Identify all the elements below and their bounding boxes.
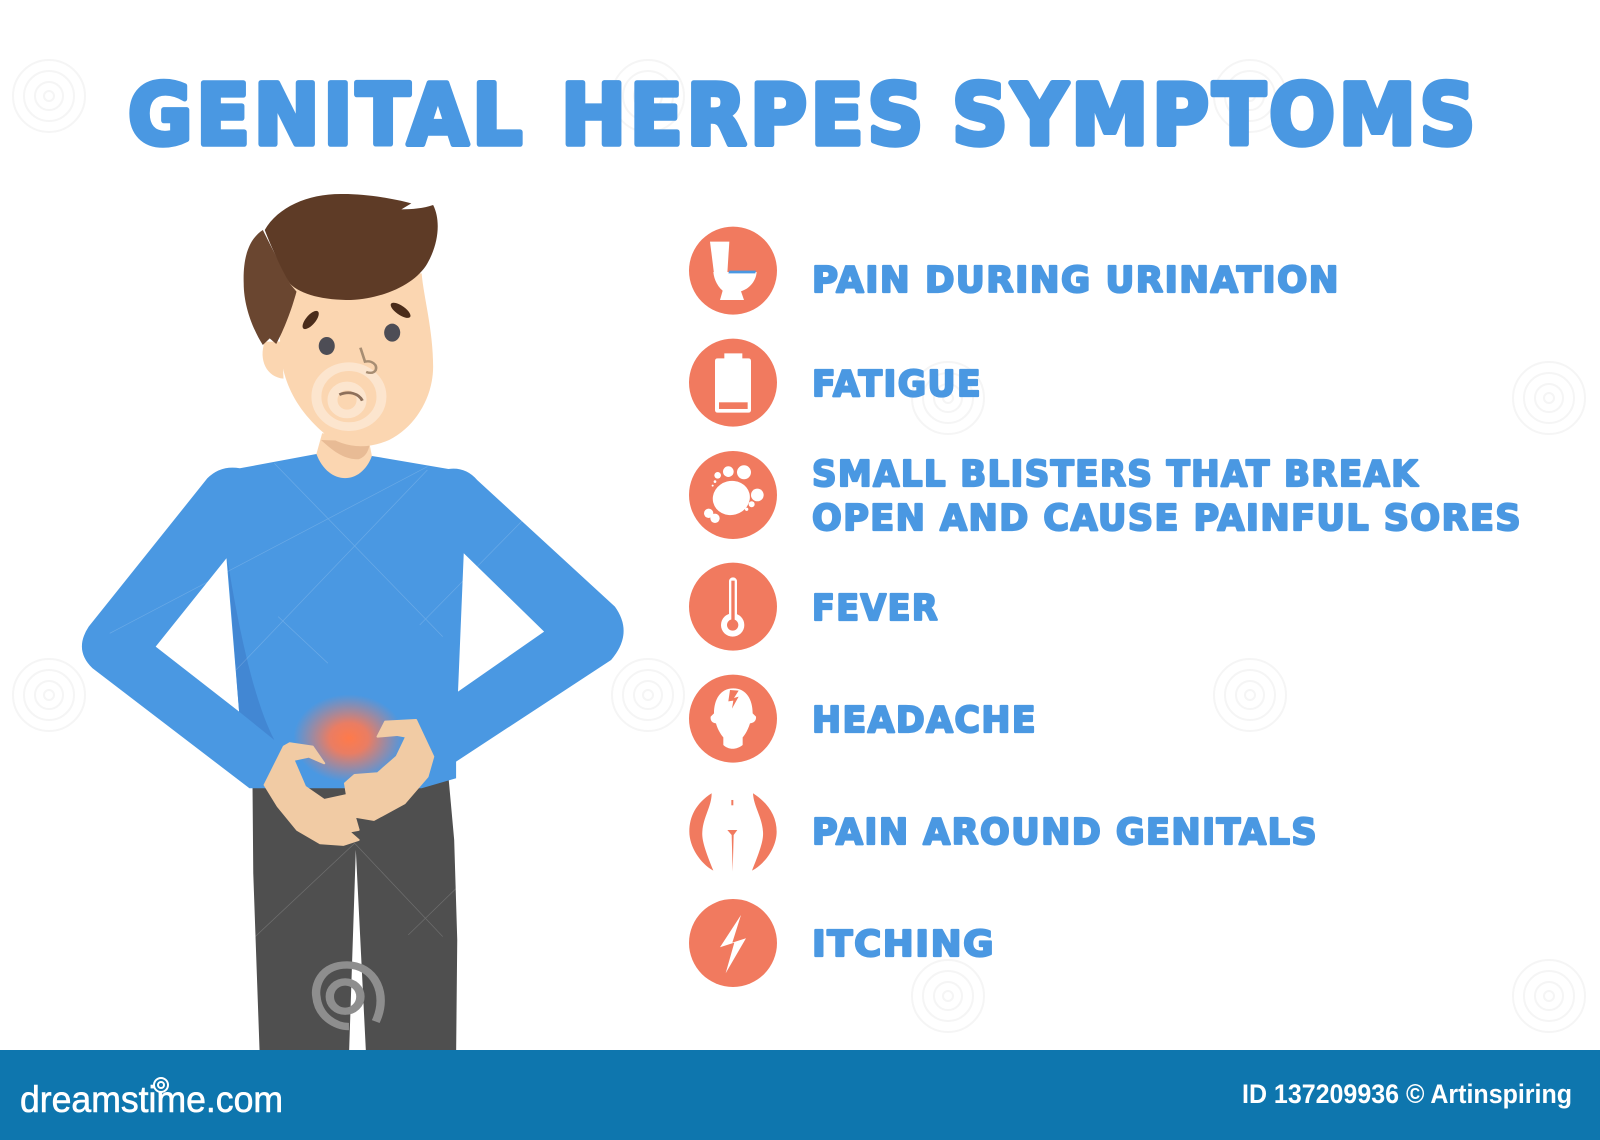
label: pain during urination: PAIN DURING URINATION: [812, 260, 1340, 301]
title: [128, 66, 1479, 164]
sweater: [82, 454, 624, 788]
eyebrows: [300, 300, 413, 331]
title: GENITAL: [128, 66, 526, 164]
neck: [316, 433, 372, 478]
watermark lines: [110, 463, 523, 937]
label: itching: ITCHING: [812, 924, 995, 965]
footer banner: [0, 1050, 1600, 1140]
trouser watermark spiral: [316, 965, 381, 1027]
icon: lower body: [689, 793, 777, 872]
icon: head with bolt: [689, 675, 777, 763]
face watermark spiral: [316, 367, 381, 427]
icon: toilet: [689, 227, 777, 315]
title: SYMPTOMS: [952, 66, 1479, 164]
mouth: [339, 393, 362, 401]
logo spiral: [154, 1078, 168, 1092]
label: blisters: [812, 454, 1522, 539]
image credit: ID 137209936 © Artinspiring: [1242, 1079, 1572, 1109]
nose: [360, 348, 376, 373]
front hair: [265, 194, 438, 300]
ear: [263, 342, 283, 379]
icon: lightning bolt: [689, 899, 777, 987]
label: fatigue: FATIGUE: [812, 364, 982, 405]
face: [280, 273, 433, 446]
label: fever: FEVER: [812, 588, 939, 629]
logo text: dreamstime.com: [20, 1079, 283, 1120]
label: pain around genitals: PAIN AROUND GENITALS: [812, 812, 1318, 853]
trousers: [252, 777, 457, 1057]
label: blisters: SMALL BLISTERS THAT BREAK: [812, 454, 1419, 495]
hands: [265, 720, 433, 845]
pain glow: [293, 694, 404, 782]
eyes: [319, 324, 400, 355]
icon: blisters: [689, 451, 777, 539]
label: headache: HEADACHE: [812, 700, 1037, 741]
icon: low battery: [689, 339, 777, 427]
label: blisters: OPEN AND CAUSE PAINFUL SORES: [812, 498, 1522, 539]
neck shadow: [321, 440, 370, 459]
title: HERPES: [561, 66, 927, 164]
illustration: man holding his abdomen: [82, 194, 624, 1057]
icon: thermometer: [689, 563, 777, 651]
back hair: [244, 230, 297, 345]
sweater shadow: [227, 558, 274, 740]
